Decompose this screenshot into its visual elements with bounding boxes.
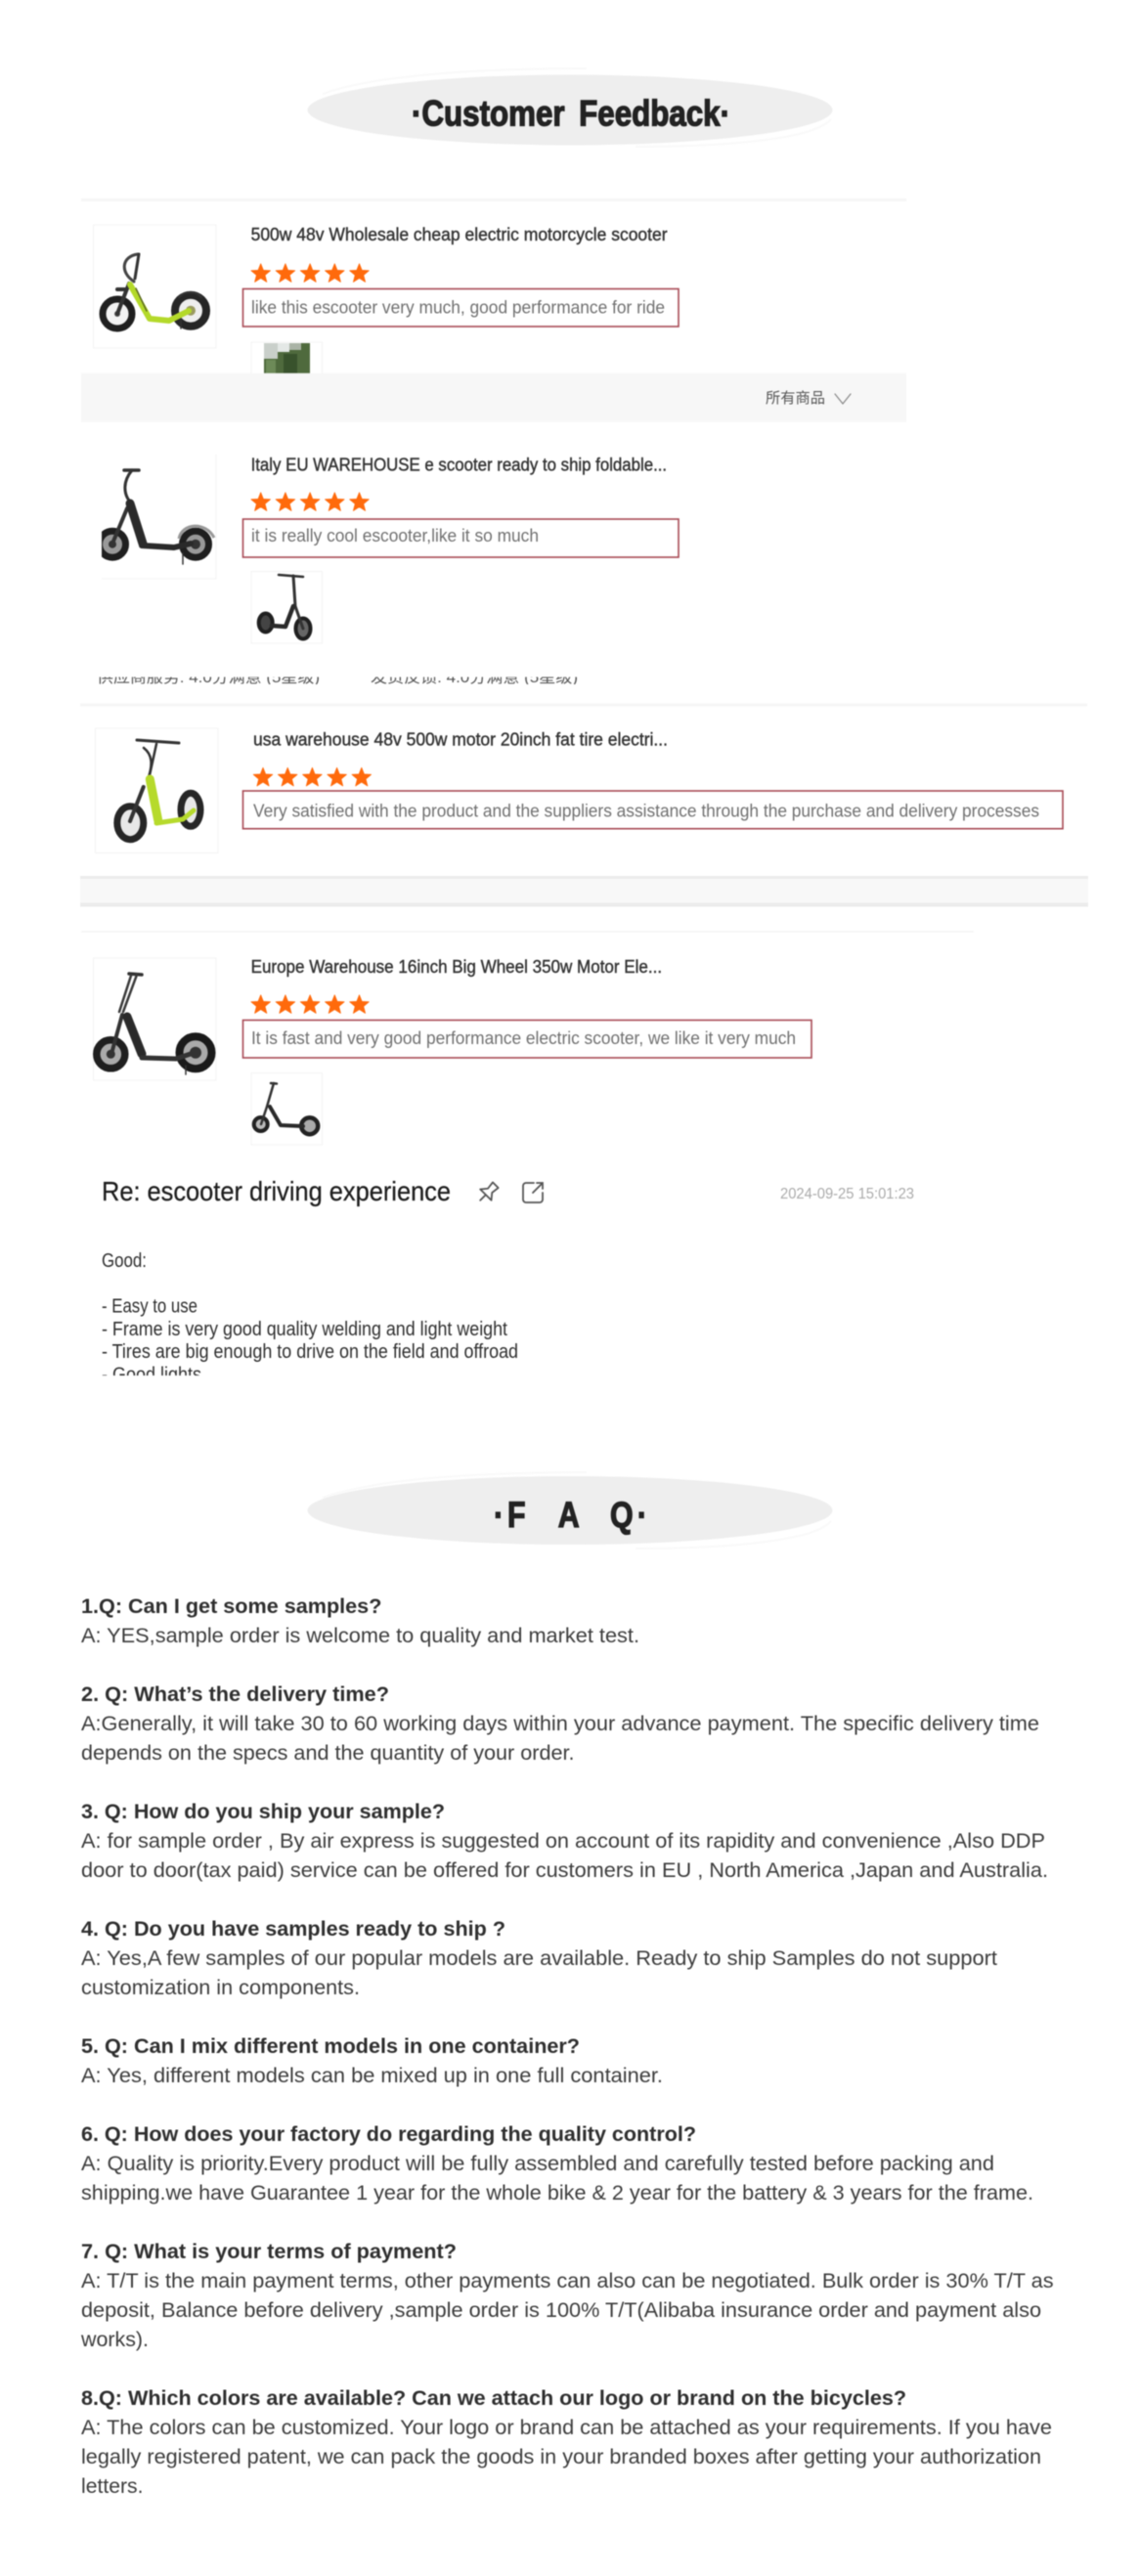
review photo thumbnail (251, 1073, 323, 1145)
FAQ 2: A:Generally, it will take 30 to 60 working days within your advance payment. The specific delivery time (81, 1713, 1039, 1735)
highlighted review comment (242, 289, 679, 327)
FAQ 7 (80, 2241, 1054, 2351)
panel: review 4 (92, 958, 813, 1145)
star rating (251, 995, 369, 1013)
FAQ 3: door to door(tax paid) service can be offered for customers in EU , North America ,Japan and Australia. (81, 1859, 1048, 1882)
FAQ 6: 6. Q: How does your factory do regarding the quality control? (81, 2123, 696, 2146)
panel: review 2 (97, 455, 679, 686)
FAQ 7: A: T/T is the main payment terms, other payments can also can be negotiated. Bulk order is 30% T/T as (81, 2270, 1054, 2292)
heading: Customer Feedback (307, 68, 833, 147)
highlighted review comment (242, 519, 679, 557)
message date: 2024-09-25 15:01:23 (780, 1186, 914, 1202)
grey separator bar (80, 876, 1088, 907)
star rating (251, 493, 369, 510)
heading: FAQ: ·F A Q· (494, 1495, 647, 1536)
message body: - Good lights (102, 1365, 201, 1386)
panel: email message (102, 1176, 914, 1386)
filter bar: 所有商品 (766, 390, 825, 407)
product image: black scooter (101, 467, 216, 579)
FAQ 8: letters. (81, 2475, 143, 2498)
FAQ 7: deposit, Balance before delivery ,sample order is 100% T/T(Alibaba insurance order and payment also (81, 2299, 1041, 2322)
FAQ 2: depends on the specs and the quantity of your order. (81, 1742, 575, 1765)
star rating (251, 264, 369, 282)
highlighted review comment (242, 1021, 811, 1058)
clipped seller rating text: 发货反馈: 4.0分满意 (5星级) (371, 668, 578, 686)
highlighted review comment: it is really cool escooter,like it so much (251, 526, 539, 546)
FAQ list (80, 1595, 1054, 2498)
message body: - Tires are big enough to drive on the field and offroad (102, 1341, 518, 1363)
message body: - Easy to use (102, 1296, 197, 1318)
highlighted review comment: It is fast and very good performance electric scooter, we like it very much (251, 1028, 796, 1048)
FAQ 5 (81, 2035, 663, 2087)
product title: Italy EU WAREHOUSE e scooter ready to ship foldable... (251, 456, 667, 475)
FAQ 7: works). (80, 2329, 149, 2351)
FAQ 6 (81, 2123, 1033, 2205)
filter bar (81, 373, 906, 422)
highlighted review comment: like this escooter very much, good performance for ride (251, 298, 665, 318)
review photo thumbnail (251, 342, 323, 381)
FAQ 4: customization in components. (81, 1977, 360, 1999)
clipped seller rating text (99, 677, 578, 685)
FAQ 4 (81, 1918, 997, 1999)
message subject: Re: escooter driving experience (102, 1176, 451, 1206)
review photo thumbnail (251, 571, 323, 643)
FAQ 8 (81, 2387, 1052, 2498)
icon: open external (523, 1183, 543, 1202)
heading: Customer Feedback: ·Customer Feedback· (412, 93, 730, 133)
FAQ 7: 7. Q: What is your terms of payment? (81, 2241, 457, 2263)
FAQ 8: legally registered patent, we can pack the goods in your branded boxes after getting your authorization (81, 2446, 1041, 2468)
FAQ 2: 2. Q: What’s the delivery time? (81, 1683, 389, 1706)
FAQ 3: A: for sample order , By air express is suggested on account of its rapidity and convenience ,Also DDP (81, 1830, 1045, 1853)
highlighted review comment: Very satisfied with the product and the suppliers assistance through the purchase and delivery processes (253, 802, 1039, 821)
star rating (253, 767, 372, 786)
FAQ 6: shipping.we have Guarantee 1 year for the whole bike & 2 year for the battery & 3 years for the frame. (81, 2182, 1033, 2205)
FAQ 6: A: Quality is priority.Every product will be fully assembled and carefully tested before packing and (81, 2153, 994, 2175)
FAQ 1 (81, 1595, 639, 1647)
FAQ 3 (81, 1801, 1048, 1882)
FAQ 2 (81, 1683, 1039, 1765)
panel: review 1 (81, 198, 906, 422)
heading: FAQ (307, 1472, 833, 1549)
FAQ 4: A: Yes,A few samples of our popular models are available. Ready to ship Samples do not support (81, 1947, 997, 1970)
FAQ 8: A: The colors can be customized. Your logo or brand can be attached as your requirements. If you have (81, 2417, 1052, 2439)
product title: usa warehouse 48v 500w motor 20inch fat tire electri... (253, 730, 668, 750)
FAQ 1: 1.Q: Can I get some samples? (81, 1595, 381, 1618)
product image: black scooter (94, 958, 216, 1080)
FAQ 3: 3. Q: How do you ship your sample? (81, 1801, 445, 1823)
FAQ 5: A: Yes, different models can be mixed up in one full container. (81, 2065, 663, 2087)
message body (102, 1250, 518, 1386)
icon: pin (475, 1180, 501, 1205)
message body: Good: (102, 1250, 147, 1272)
product image: green scooter (96, 728, 218, 852)
highlighted review comment (242, 791, 1063, 829)
FAQ 1: A: YES,sample order is welcome to quality and market test. (81, 1625, 639, 1647)
panel: review 3 (80, 704, 1088, 907)
product title: Europe Warehouse 16inch Big Wheel 350w Motor Ele... (251, 957, 662, 977)
FAQ 4: 4. Q: Do you have samples ready to ship ? (81, 1918, 505, 1941)
FAQ 8: 8.Q: Which colors are available? Can we attach our logo or brand on the bicycles? (81, 2387, 906, 2410)
FAQ 5: 5. Q: Can I mix different models in one container? (81, 2035, 580, 2058)
product image: green scooter (94, 225, 216, 348)
message body: - Frame is very good quality welding and light weight (102, 1319, 507, 1340)
product title: 500w 48v Wholesale cheap electric motorcycle scooter (251, 225, 668, 244)
clipped seller rating text: 供应商服务: 4.0分满意 (5星级) (97, 668, 320, 686)
